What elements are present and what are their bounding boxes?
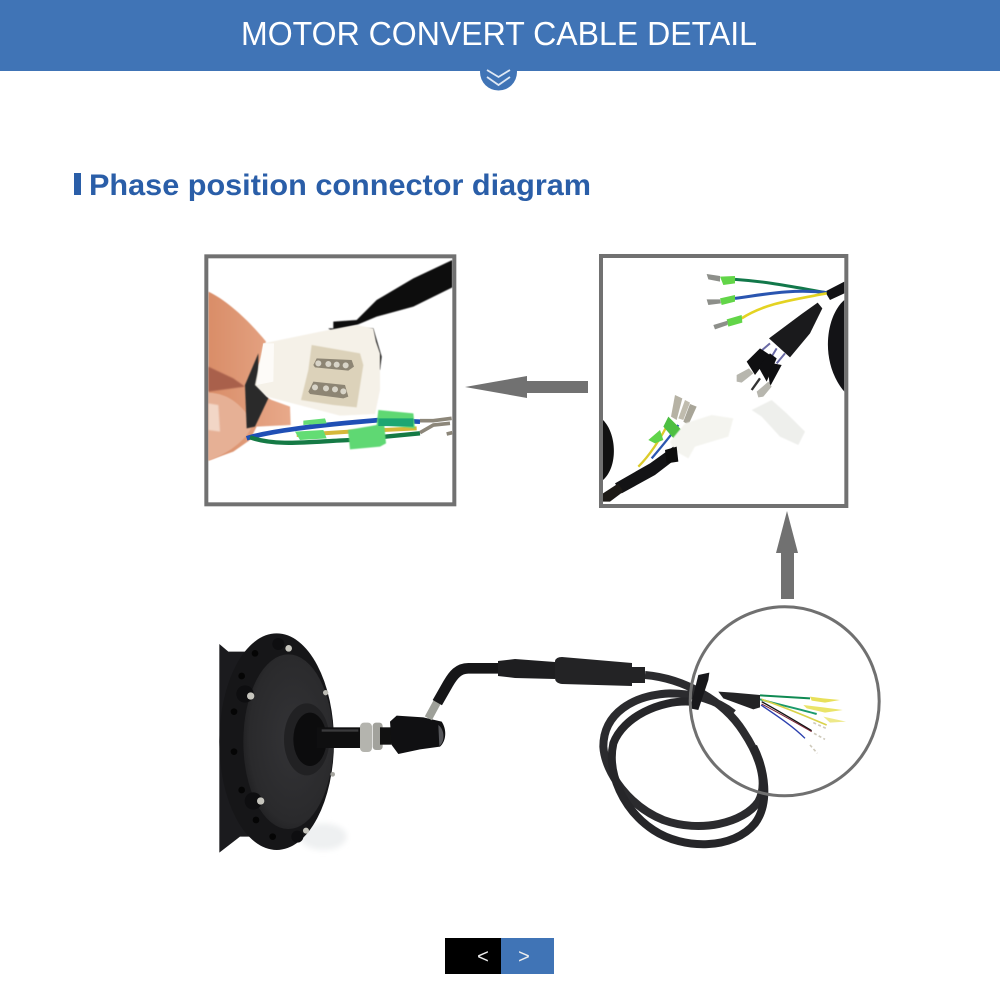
arrow: pointing left xyxy=(465,376,588,398)
navigation buttons: < xyxy=(477,946,489,968)
heat shrink lower xyxy=(615,447,677,493)
previous button xyxy=(445,938,501,974)
metal lower pins xyxy=(671,395,682,420)
panel: connector held in hand photo xyxy=(206,256,454,504)
section heading: Phase position connector diagram xyxy=(89,169,591,202)
axle xyxy=(317,727,363,748)
white connector lower xyxy=(670,415,733,458)
green terminal sleeves xyxy=(348,410,415,449)
cable neck xyxy=(428,702,437,718)
flange bosses and holes xyxy=(231,638,303,843)
fine wires xyxy=(760,695,810,698)
motor body xyxy=(219,644,250,853)
photo: hub motor and axle xyxy=(219,633,500,853)
hand xyxy=(208,292,291,461)
lower fine wires and sleeve xyxy=(638,428,666,468)
header banner xyxy=(0,0,1000,71)
contact pins xyxy=(313,358,354,371)
arrow: pointing up xyxy=(776,511,798,599)
green wire xyxy=(735,279,827,293)
cable coil top right xyxy=(828,300,844,392)
callout: circle highlighting wires xyxy=(690,607,879,796)
metal pins xyxy=(737,368,753,383)
cable tie xyxy=(690,673,709,710)
cable exit cap xyxy=(390,716,445,754)
panel: wires and connector parts photo xyxy=(601,256,846,506)
motor shadow xyxy=(300,823,347,850)
cable loops xyxy=(603,675,763,826)
green sleeves and terminals xyxy=(720,276,735,285)
icon: chevron badge xyxy=(480,54,517,90)
blue wire xyxy=(735,291,827,298)
black heat shrink xyxy=(769,303,822,357)
hub cover xyxy=(219,633,334,850)
photo: cable loops and split wires xyxy=(603,673,846,844)
metal terminals xyxy=(420,418,452,434)
wires xyxy=(247,420,420,438)
nuts xyxy=(360,723,372,752)
fine wires xyxy=(758,343,785,363)
bolts xyxy=(285,645,292,652)
navigation buttons xyxy=(445,938,554,974)
connector body on motor cable xyxy=(498,657,645,686)
banner title: MOTOR CONVERT CABLE DETAIL xyxy=(241,15,757,52)
white connector cap xyxy=(752,400,805,445)
black cable xyxy=(333,260,452,330)
yellow terminals xyxy=(810,697,840,703)
next button xyxy=(501,938,554,974)
yellow wire xyxy=(742,293,827,318)
black crimp connectors xyxy=(747,348,770,375)
white connector xyxy=(255,325,380,416)
coil bottom left xyxy=(603,420,614,480)
navigation buttons: > xyxy=(518,946,530,968)
black shrink tube xyxy=(718,692,760,709)
